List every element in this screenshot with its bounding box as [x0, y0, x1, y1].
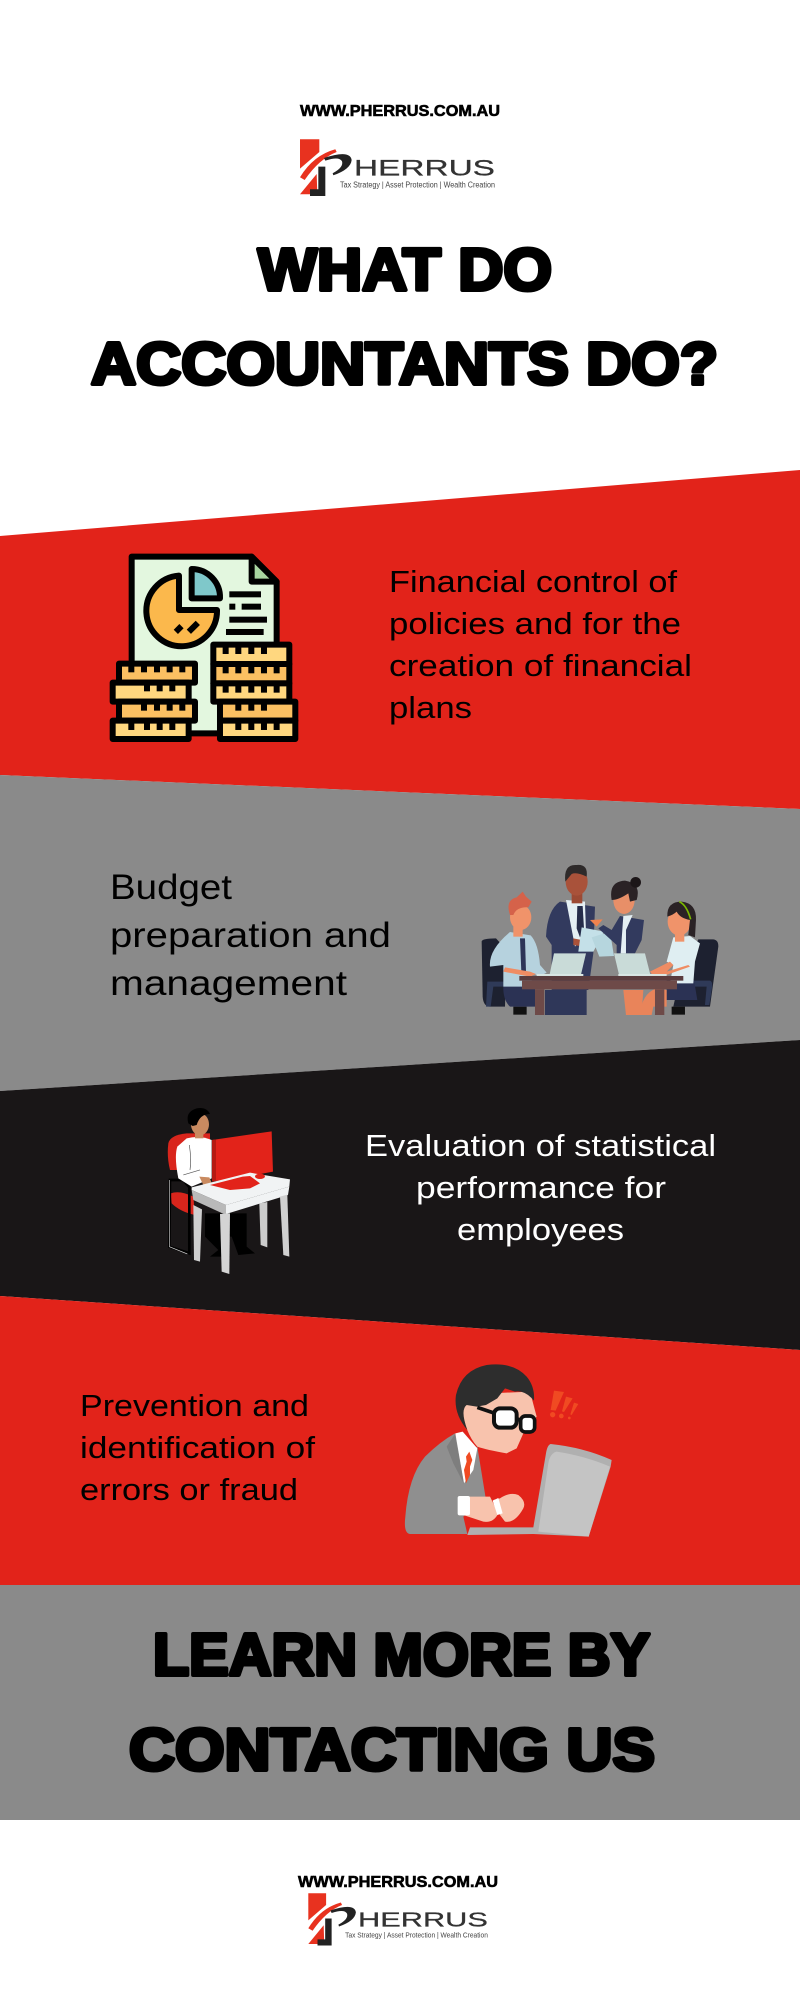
chair — [168, 1133, 210, 1170]
text: evaluation: Evaluation of statistical — [365, 1128, 716, 1163]
logo bottom — [308, 1893, 488, 1945]
text: financial control: creation of financial — [389, 648, 692, 683]
suit — [405, 1433, 486, 1534]
illustration: business team at table — [482, 865, 718, 1015]
text: evaluation — [365, 1128, 716, 1247]
logo bottom: Tax Strategy | Asset Protection | Wealth Creation — [345, 1931, 488, 1940]
laptop — [467, 1444, 612, 1537]
exclamation marks — [550, 1391, 578, 1419]
right woman — [667, 980, 697, 1000]
call to action heading — [129, 1622, 655, 1783]
text: financial control — [389, 564, 692, 725]
text: budget preparation: preparation and — [110, 916, 391, 955]
text: prevention: Prevention and — [80, 1388, 309, 1423]
text: prevention: errors or fraud — [80, 1472, 298, 1507]
text: prevention: identification of — [80, 1430, 315, 1465]
text: evaluation: employees — [457, 1212, 624, 1247]
desk — [192, 1173, 290, 1205]
text: prevention — [80, 1388, 315, 1507]
call to action heading: LEARN MORE BY — [153, 1622, 650, 1688]
standing man — [545, 990, 587, 1015]
hands — [458, 1497, 498, 1522]
text: financial control: policies and for the — [389, 606, 681, 641]
band: gray call to action panel — [0, 1585, 800, 1820]
logo top: Tax Strategy | Asset Protection | Wealth Creation — [340, 180, 495, 189]
monitor — [212, 1131, 273, 1182]
title: ACCOUNTANTS DO? — [91, 331, 718, 397]
illustration: worried man at laptop — [405, 1364, 612, 1537]
band: gray budget panel — [0, 775, 800, 1091]
sweater — [176, 1137, 212, 1187]
papers — [578, 927, 604, 952]
hair — [456, 1364, 534, 1430]
icon: document with pie chart and coins — [113, 557, 295, 739]
shirt and tie — [455, 1432, 477, 1483]
left man — [503, 985, 535, 1007]
band: red financial control panel — [0, 470, 800, 809]
website url top: WWW.PHERRUS.COM.AU — [300, 103, 500, 120]
text: budget preparation: Budget — [110, 868, 232, 907]
head — [191, 1113, 209, 1135]
call to action heading: CONTACTING US — [129, 1717, 655, 1783]
illustration: man at computer desk — [168, 1108, 290, 1274]
glasses — [494, 1408, 517, 1428]
band: black evaluation panel — [0, 1040, 800, 1350]
table — [519, 976, 683, 981]
text: budget preparation: management — [110, 964, 347, 1003]
title — [91, 237, 718, 397]
band: red fraud prevention panel — [0, 1296, 800, 1585]
logo top: HERRUS — [354, 155, 495, 180]
logo top — [300, 139, 495, 196]
face — [462, 1392, 537, 1453]
text: budget preparation — [110, 868, 391, 1003]
logo bottom: HERRUS — [358, 1908, 488, 1931]
laptops — [549, 953, 586, 976]
center woman — [623, 990, 643, 1015]
text: evaluation: performance for — [416, 1170, 666, 1205]
text: financial control: Financial control of — [389, 564, 677, 599]
text: financial control: plans — [389, 690, 472, 725]
title: WHAT DO — [258, 237, 552, 303]
website url bottom: WWW.PHERRUS.COM.AU — [298, 1874, 498, 1891]
legs — [205, 1213, 255, 1257]
